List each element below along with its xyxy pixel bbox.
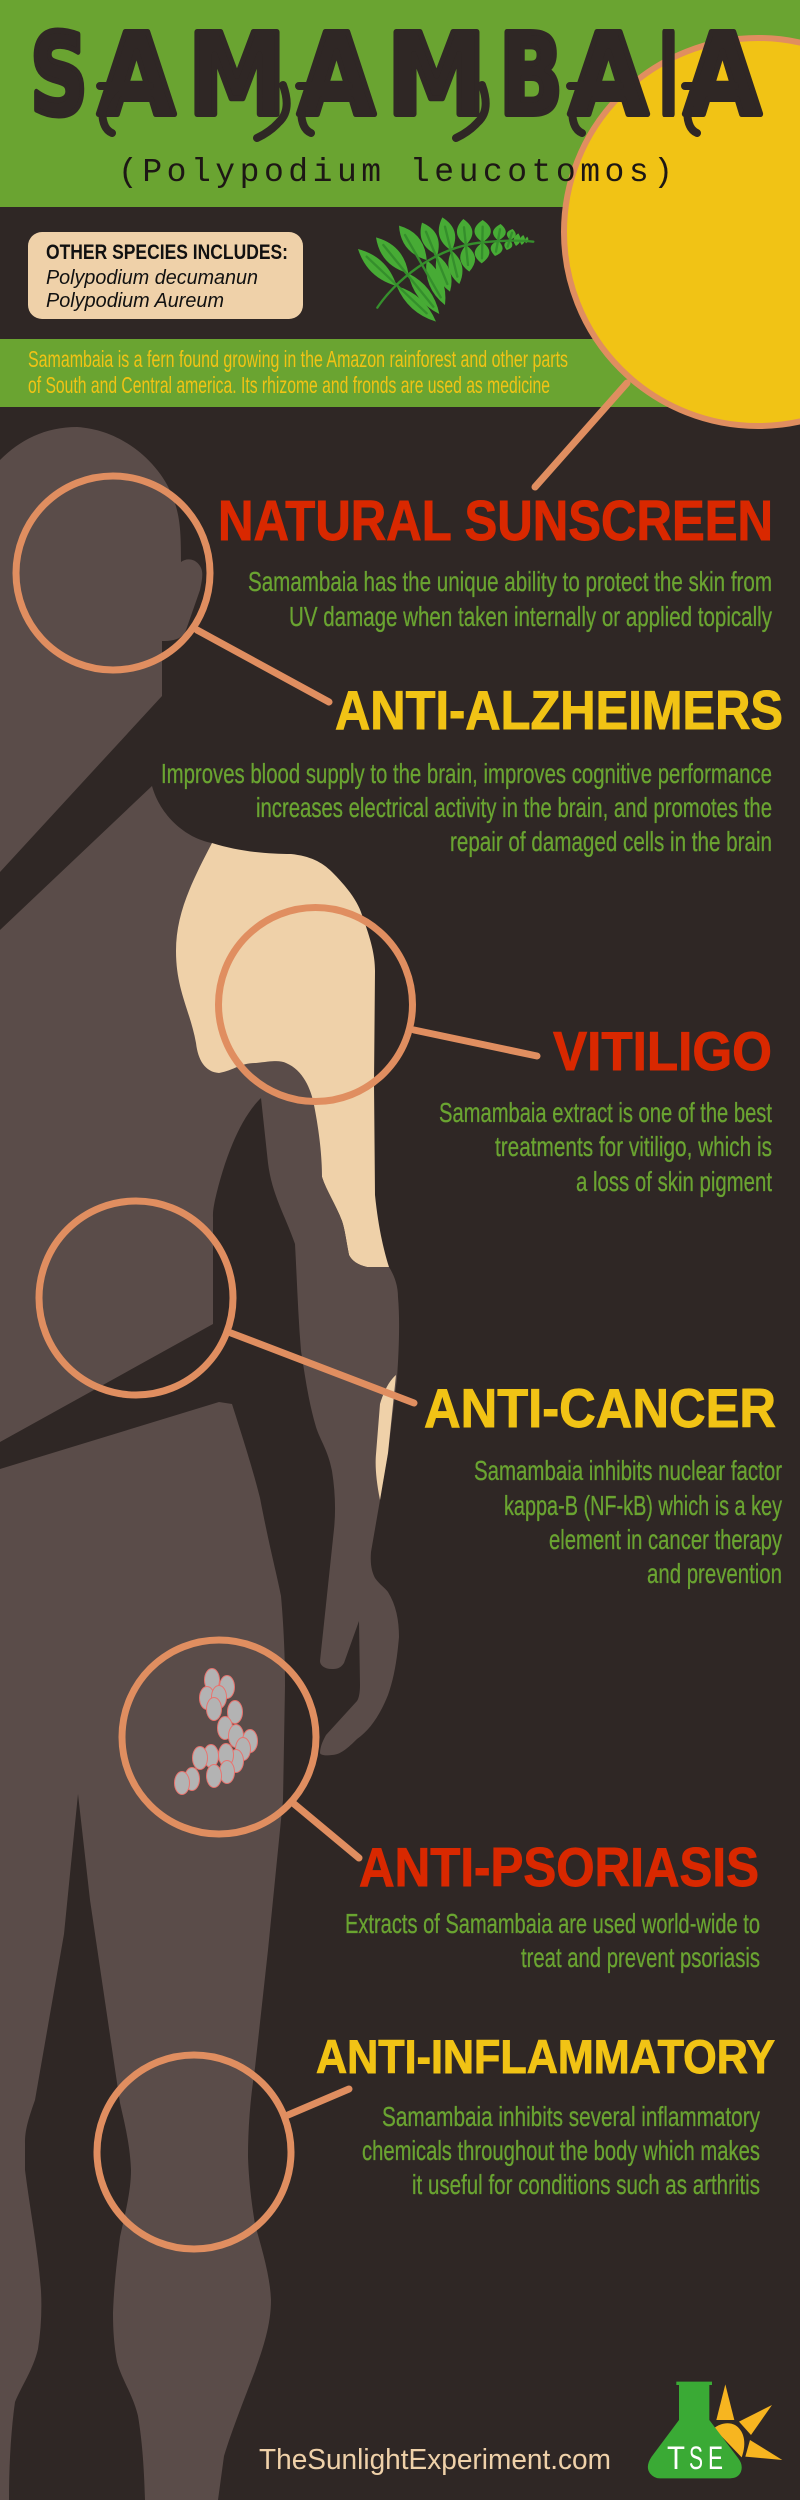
callout: thigh circle <box>122 1640 316 1834</box>
logo letters: E <box>708 2440 723 2476</box>
hips and legs <box>0 1402 285 2500</box>
title <box>30 11 761 141</box>
text: species two: Polypodium Aureum <box>46 290 224 312</box>
torso and arm <box>0 786 399 1755</box>
heading: other species: OTHER SPECIES INCLUDES: <box>46 241 288 264</box>
callout: head circle <box>16 476 210 670</box>
heading: ANTI-CANCER <box>424 1377 776 1439</box>
icon: fern <box>358 217 533 322</box>
arm skin patch: vitiligo <box>150 843 389 1267</box>
title: A <box>98 11 175 141</box>
panel: green intro band <box>0 339 800 407</box>
section: vitiligo <box>439 1020 772 1197</box>
logo letters: T <box>667 2440 685 2476</box>
title: S <box>30 11 88 141</box>
arm skin sliver: vitiligo <box>376 1375 396 1500</box>
section: natural sunscreen <box>218 489 773 632</box>
arrow: torso to anti-cancer <box>231 1333 414 1403</box>
panel: top green header <box>0 0 800 207</box>
title: A <box>569 11 648 141</box>
title: M <box>188 11 286 141</box>
icon: TSE flask logo <box>648 2382 782 2478</box>
text block <box>248 566 772 632</box>
text: intro paragraph: Samambaia is a fern found growing in the Amazon rainforest and other parts <box>28 346 568 372</box>
title: I <box>659 11 678 141</box>
text block <box>362 2101 760 2200</box>
text block <box>474 1455 782 1589</box>
subtitle: (Polypodium leucotomos) <box>118 154 673 191</box>
logo letters <box>667 2440 723 2476</box>
title: B <box>499 11 563 141</box>
text block <box>161 758 772 857</box>
panel: other species <box>28 232 303 319</box>
callout: torso circle <box>39 1201 233 1395</box>
arrow: head to anti-alzheimers <box>197 630 329 702</box>
text: intro paragraph <box>28 346 568 398</box>
arrow: shoulder to vitiligo <box>414 1030 537 1056</box>
footer url: TheSunlightExperiment.com <box>259 2444 611 2476</box>
flask <box>648 2382 742 2478</box>
heading: ANTI-PSORIASIS <box>359 1836 759 1898</box>
text block <box>345 1908 760 1973</box>
text: intro paragraph: of South and Central america. Its rhizome and fronds are used as medicine <box>28 372 550 398</box>
head and neck <box>0 427 202 872</box>
sun rays and half sun <box>714 2384 782 2460</box>
section: anti-psoriasis <box>345 1836 760 1973</box>
section: anti-inflammatory <box>316 2030 775 2200</box>
text block <box>439 1097 772 1197</box>
callout: knee circle <box>97 2055 291 2249</box>
title: A <box>684 11 761 141</box>
logo letters: S <box>689 2440 703 2476</box>
title: M <box>387 11 486 141</box>
illustration: human silhouette <box>0 427 399 2500</box>
icon: psoriasis patches <box>174 1668 258 1794</box>
section: anti-alzheimers <box>161 679 783 857</box>
icon: sun <box>564 38 800 426</box>
arrow: sun connector <box>535 383 627 487</box>
arrow: thigh to anti-psoriasis <box>293 1803 359 1858</box>
section: anti-cancer <box>424 1377 782 1589</box>
heading: VITILIGO <box>553 1020 772 1082</box>
callout: shoulder circle <box>218 908 412 1102</box>
title: A <box>298 11 375 141</box>
text: species one: Polypodium decumanun <box>46 267 258 289</box>
arrow: knee to anti-inflammatory <box>288 2089 349 2115</box>
